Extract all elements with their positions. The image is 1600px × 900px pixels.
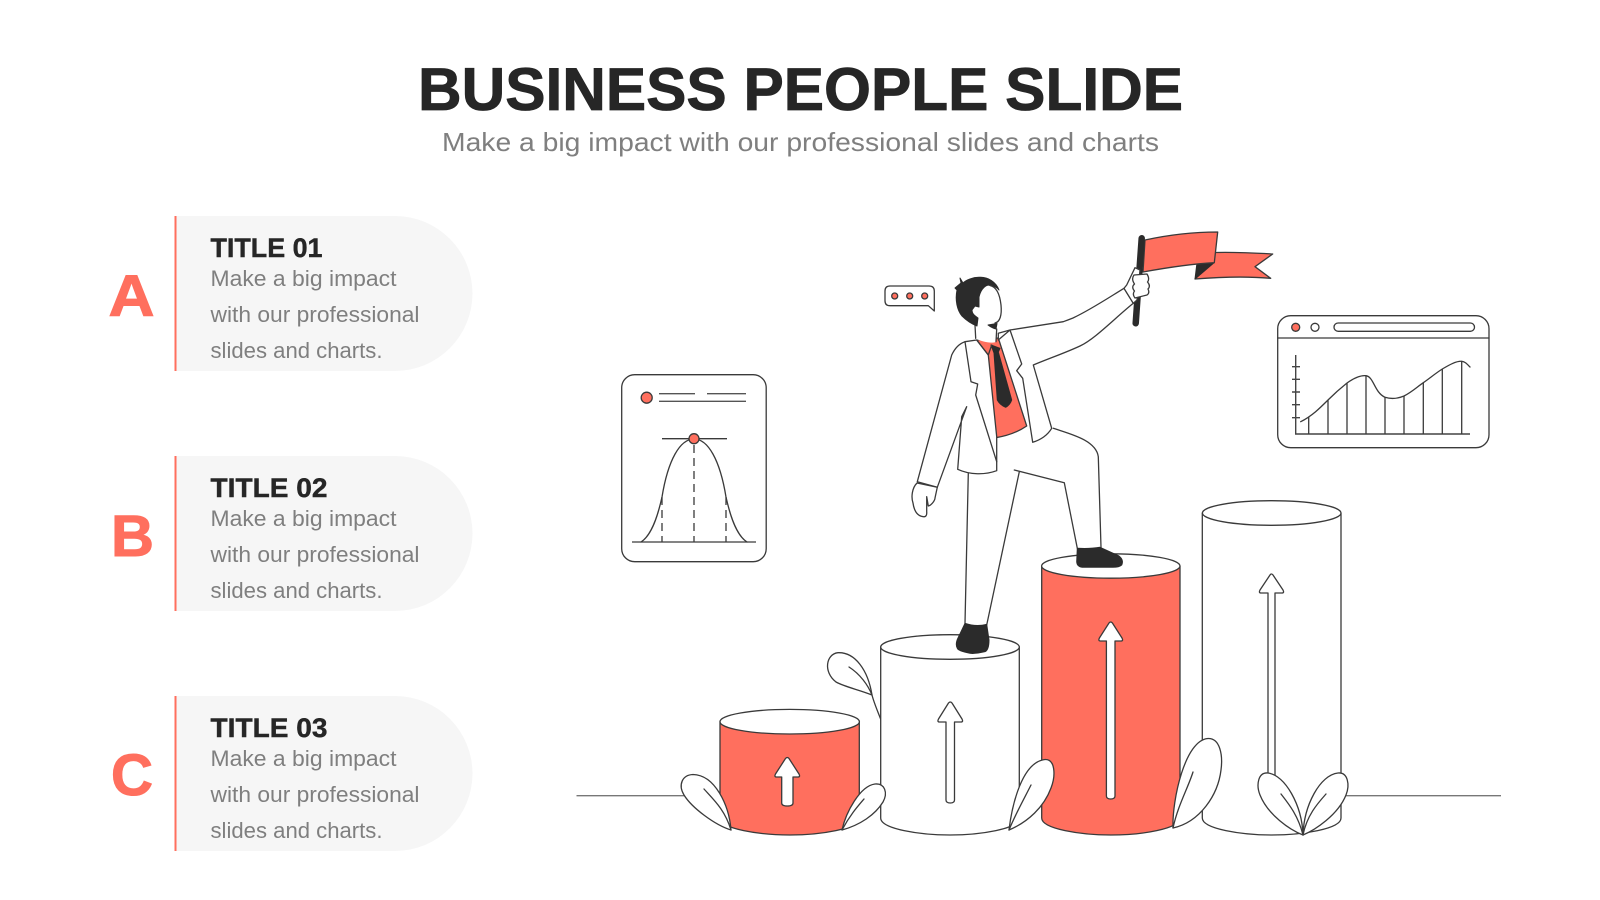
leaf: right of bar 2 — [1009, 759, 1054, 830]
right jacket panel — [998, 288, 1133, 442]
flag ribbon back — [1195, 252, 1273, 279]
text block C — [209, 746, 420, 843]
arrow in bar 4 — [1259, 574, 1284, 800]
accent bar A — [174, 216, 176, 371]
necktie — [991, 345, 1012, 407]
panel: A — [108, 216, 472, 371]
text block A — [209, 266, 420, 363]
text block B: Make a big impact — [210, 506, 397, 531]
hand left — [912, 483, 937, 517]
bar 1: coral cylinder — [720, 709, 859, 835]
leaf pair: bar 4 — [1258, 773, 1348, 835]
flag fold — [1195, 263, 1214, 279]
heading: title 02: TITLE 02 — [210, 473, 328, 503]
panel background B — [175, 456, 472, 611]
text block A: Make a big impact — [210, 266, 397, 291]
panel background C — [175, 696, 472, 851]
letter A: A — [108, 264, 154, 329]
leaf: behind second bar — [828, 653, 881, 720]
bar 3: coral cylinder — [1042, 554, 1180, 835]
face — [979, 285, 1001, 324]
left arm and jacket — [917, 340, 997, 487]
bar 2: white cylinder — [881, 635, 1019, 835]
text block B: slides and charts. — [210, 578, 382, 603]
arrow in bar 3 — [1099, 622, 1123, 799]
flag pole — [1136, 238, 1142, 323]
bar 4: white cylinder — [1202, 501, 1341, 835]
title: BUSINESS PEOPLE SLIDE — [418, 56, 1183, 123]
face outline — [990, 286, 1001, 323]
neck outline — [975, 325, 997, 342]
accent bar C — [174, 696, 176, 851]
text block A: with our professional — [209, 302, 420, 327]
arrow in bar 1 — [775, 758, 800, 806]
leaf: right of bar 3 — [1173, 738, 1222, 828]
heading: title 01: TITLE 01 — [210, 233, 322, 263]
fist — [1133, 274, 1149, 298]
leaves at the base of the bars — [681, 738, 1348, 835]
panel: C — [111, 696, 472, 851]
neck — [975, 318, 997, 343]
back leg and trousers — [965, 428, 1101, 625]
flag front — [1143, 232, 1218, 272]
collar — [977, 340, 992, 355]
chin shadow — [988, 324, 997, 329]
chart card: bell curve — [622, 375, 766, 562]
panel background A — [175, 216, 472, 371]
arrow in bar 2 — [938, 702, 963, 803]
leaf: right of bar 1 — [842, 784, 885, 830]
panel: B — [111, 456, 472, 611]
leaf: left of bar 1 — [681, 774, 731, 830]
shoe left — [956, 623, 989, 653]
chart card: browser line chart — [1278, 316, 1489, 448]
text block A: slides and charts. — [210, 338, 382, 363]
text block C: with our professional — [209, 782, 420, 807]
accent bar B — [174, 456, 176, 611]
letter B: B — [111, 504, 154, 569]
hair — [955, 277, 999, 326]
flag — [1136, 232, 1273, 323]
letter C: C — [111, 743, 153, 808]
illustration: ground line — [576, 795, 1501, 797]
shirt — [977, 338, 1027, 438]
text block B — [209, 506, 420, 603]
text block C: slides and charts. — [210, 818, 382, 843]
speech bubble — [885, 286, 934, 311]
hand right — [1124, 268, 1140, 303]
text block C: Make a big impact — [210, 746, 397, 771]
shoe right — [1077, 547, 1122, 567]
businessman — [912, 268, 1149, 653]
jacket lapel left — [965, 342, 997, 462]
subtitle: Make a big impact with our professional slides and charts — [442, 127, 1159, 157]
heading: title 03: TITLE 03 — [210, 713, 328, 743]
text block B: with our professional — [209, 542, 420, 567]
